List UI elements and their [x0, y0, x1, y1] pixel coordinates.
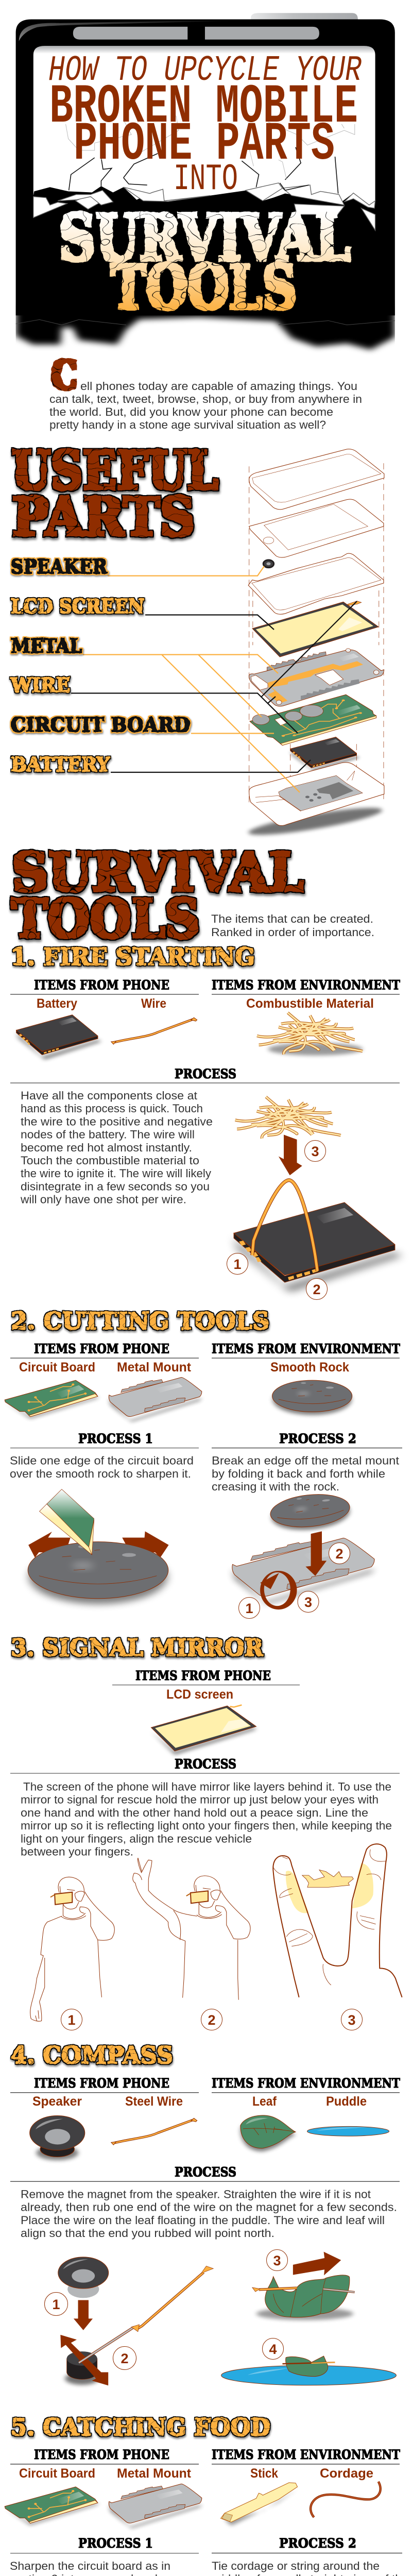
step number circles: 1 [52, 2297, 60, 2312]
process headers [10, 1431, 402, 1448]
item labels: Circuit Board [19, 2466, 95, 2481]
item label: LCD screen [166, 1687, 233, 1702]
section 2: cutting tools [5, 1307, 402, 1619]
process 2 illustration [232, 1490, 374, 1609]
phone body with torn bottom edge [16, 13, 395, 350]
intro paragraph with drop cap [49, 352, 362, 431]
step number circles: 3 [304, 1595, 312, 1610]
subheading text [211, 912, 374, 939]
heading: useful parts [12, 439, 218, 548]
step number circles: 2 [313, 1282, 321, 1297]
step number circles: 3 [273, 2253, 281, 2268]
column headers: ITEMS FROM PHONE [34, 2076, 169, 2091]
process 2 text [212, 1454, 399, 1493]
step number circles: 1 [245, 1601, 253, 1616]
subheading text: Ranked in order of importance. [211, 926, 374, 939]
step number circles: 4 [269, 2342, 277, 2357]
process 1 text: Slide one edge of the circuit board [10, 1454, 194, 1467]
section heading: 2. CUTTING TOOLS [11, 1307, 269, 1335]
process text: become red hot almost instantly. [21, 1141, 192, 1154]
step number circles: 2 [335, 1546, 344, 1562]
process text: one hand and with the other hand hold out a peace sign. Line the [21, 1806, 368, 1819]
process 2 text [212, 2560, 408, 2576]
heading: survival tools: TOOLS [12, 888, 200, 950]
part labels: METAL [11, 634, 82, 657]
illustrations: circuit board, metal mount, rock [5, 1377, 352, 1422]
title line: tools: TOOLS [111, 251, 297, 323]
heading: useful parts: PARTS [12, 486, 195, 548]
section 1: fire starting [10, 943, 402, 1299]
illustrations: speaker, wire, leaf, puddle [30, 2115, 389, 2160]
process text [21, 2188, 397, 2240]
process text: mirror to signal for rescue hold the mirror up just below your eyes with [21, 1793, 379, 1806]
drop cap C: C [51, 352, 78, 399]
column headers: ITEMS FROM PHONE [34, 1342, 169, 1356]
section 4: compass [10, 2041, 400, 2385]
item labels: Speaker [32, 2094, 82, 2109]
part labels: WIRE [10, 673, 70, 697]
section heading: 1. FIRE STARTING [11, 943, 255, 971]
process illustration: folded leaf with wire [252, 2252, 355, 2320]
step number circles: 3 [311, 1144, 319, 1159]
leader lines [71, 566, 357, 792]
item labels: Metal Mount [117, 2466, 192, 2481]
phone shell layers [248, 449, 384, 803]
step number circles: 2 [121, 2351, 129, 2366]
section heading: 3. SIGNAL MIRROR [11, 1634, 264, 1662]
process 2 text: creasing it with the rock. [212, 1480, 339, 1493]
process text: mirror up so it is reflecting light onto your fingers then, while keeping the [21, 1819, 392, 1832]
item labels: Smooth Rock [270, 1360, 349, 1375]
process text [20, 1089, 213, 1206]
part labels: BATTERY [11, 753, 110, 776]
part labels: CIRCUIT BOARD [11, 713, 190, 736]
step number circles [61, 2009, 363, 2030]
item labels: Combustible Material [246, 996, 374, 1011]
process illustration: rub wire on magnet [58, 2257, 213, 2385]
process 1 text [10, 2560, 194, 2576]
process 2 text: by folding it back and forth while [212, 1467, 385, 1480]
lcd, metal and circuit layers [249, 601, 384, 745]
process headers: PROCESS 2 [279, 1431, 356, 1446]
column headers [10, 978, 400, 995]
process illustration [234, 1097, 402, 1292]
item labels [37, 996, 374, 1011]
item labels [32, 2094, 367, 2109]
process text: the wire to ignite it. The wire will likely [21, 1167, 211, 1180]
figure 2: person with peace sign [133, 1858, 250, 2000]
figure 3: fingers framing plane [273, 1844, 402, 1997]
process text: Touch the combustible material to [21, 1154, 199, 1167]
part labels: LCD SCREEN [11, 595, 144, 618]
item labels: Battery [37, 996, 77, 1011]
process text: nodes of the battery. The wire will [21, 1128, 195, 1141]
process text: already, then rub one end of the wire on the magnet for a few seconds. [21, 2201, 397, 2214]
illustrations: circuit, metal, stick, cordage [5, 2482, 381, 2529]
item labels: Stick [250, 2466, 278, 2481]
step number circles: 2 [208, 2012, 216, 2028]
item labels: Puddle [326, 2094, 367, 2109]
column headers: ITEMS FROM PHONE [34, 2447, 169, 2462]
item labels: Steel Wire [125, 2094, 183, 2109]
step number circles: 3 [348, 2012, 356, 2028]
process headers: PROCESS 2 [279, 2536, 356, 2551]
heading: survival tools: SURVIVAL [12, 841, 304, 904]
items header: ITEMS FROM PHONE [135, 1668, 271, 1683]
process 1 text: Sharpen the circuit board as in [10, 2560, 170, 2572]
process text: align so that the end you rubbed will point north. [21, 2227, 274, 2240]
step number circles: 1 [67, 2012, 76, 2028]
panel: useful parts [10, 439, 384, 840]
process 2 text: Tie cordage or string around the [212, 2560, 380, 2572]
process 1 text [10, 1454, 194, 1480]
process text: the wire to the positive and negative [21, 1115, 213, 1128]
intro text: can talk, text, tweet, browse, shop, or buy from anywhere in [49, 393, 362, 405]
intro text: the world. But, did you know your phone can become [49, 405, 333, 418]
process header: PROCESS [175, 2165, 236, 2179]
part labels [10, 555, 190, 776]
process 2 text: Break an edge off the metal mount [212, 1454, 399, 1467]
process 1 text: over the smooth rock to sharpen it. [10, 1467, 191, 1480]
process text [21, 1781, 392, 1858]
heading: useful parts: USEFUL [12, 439, 218, 502]
intro text: pretty handy in a stone age survival situation as well? [49, 418, 326, 431]
process text: disintegrate in a few seconds so you [21, 1180, 210, 1193]
process text: Remove the magnet from the speaker. Straighten the wire if it is not [21, 2188, 371, 2201]
section heading: 5. CATCHING FOOD [11, 2413, 270, 2441]
process text: hand as this process is quick. Touch [21, 1102, 203, 1115]
column headers: ITEMS FROM PHONE [34, 978, 169, 993]
process text: will only have one shot per wire. [20, 1193, 186, 1206]
step number circles [44, 2249, 287, 2370]
item labels: Leaf [252, 2094, 277, 2109]
process headers [10, 2536, 402, 2554]
process headers: PROCESS 1 [78, 2536, 153, 2551]
figure 1: person holding mirror [30, 1877, 114, 2021]
hero: phone title panel [16, 13, 395, 350]
title line: into: INTO [174, 158, 238, 200]
section 3: signal mirror [10, 1634, 402, 2030]
process text: The screen of the phone will have mirror like layers behind it. To use the [23, 1781, 391, 1793]
intro text: ell phones today are capable of amazing things. You [80, 380, 357, 393]
item labels: Wire [141, 996, 166, 1011]
intro text [49, 380, 362, 431]
process illustration: leaf on puddle [221, 2356, 396, 2385]
step number circles: 1 [233, 1257, 242, 1272]
item labels: Metal Mount [117, 1360, 192, 1375]
step number circles [227, 1141, 328, 1299]
process header: PROCESS [175, 1066, 236, 1081]
process headers: PROCESS 1 [78, 1431, 153, 1446]
heading: survival tools [12, 841, 304, 950]
process 1 illustration [28, 1489, 169, 1604]
section heading: 4. COMPASS [11, 2041, 173, 2069]
item labels [19, 1360, 349, 1375]
section 5: catching food [5, 2413, 408, 2576]
process text: Have all the components close at [21, 1089, 197, 1102]
illustrations: battery, wire, combustible material [16, 1013, 363, 1060]
part labels: SPEAKER [11, 555, 107, 578]
cracked phone screen [33, 46, 375, 230]
process text: between your fingers. [21, 1845, 133, 1858]
item labels: Cordage [320, 2466, 373, 2481]
column headers [10, 2076, 400, 2093]
item labels [19, 2466, 373, 2481]
process header: PROCESS [175, 1757, 236, 1772]
column headers [10, 1342, 400, 1359]
item labels: Circuit Board [19, 1360, 95, 1375]
column headers [10, 2447, 400, 2465]
process text: light on your fingers, align the rescue vehicle [21, 1832, 252, 1845]
subheading text: The items that can be created. [211, 912, 373, 925]
battery layer and back cover [247, 737, 384, 840]
process text: Place the wire on the leaf floating in the puddle. The wire and leaf will [21, 2214, 385, 2227]
lcd screen illustration [151, 1705, 256, 1755]
exploded phone diagram [247, 449, 384, 840]
step number circles [239, 1543, 350, 1619]
